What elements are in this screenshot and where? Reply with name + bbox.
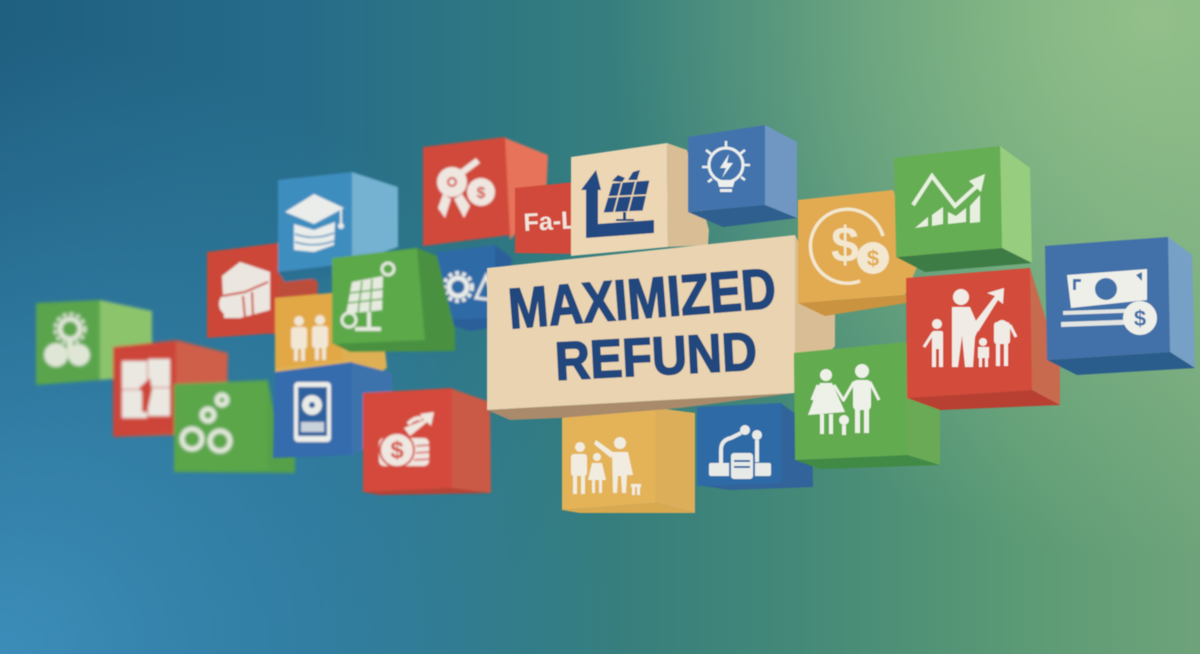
heading: Refund: REFUND [553, 321, 758, 392]
cube: orange dollar [798, 190, 925, 316]
cube: beige Maximized Refund main block [487, 235, 835, 420]
icon: family with arrow [571, 437, 641, 495]
cube: blue tablet [273, 362, 392, 458]
icon: couple and child [808, 364, 879, 435]
cube: red gift [113, 340, 228, 437]
icon: gears and coins [182, 395, 230, 451]
icon: graduation cap [285, 194, 344, 252]
icon: dollar circle and coin [810, 209, 889, 283]
cube: green solar [332, 248, 455, 352]
far-left cubes group [36, 300, 295, 473]
label: Fa-L: Fa-L [523, 206, 577, 237]
cube: orange family [562, 407, 695, 513]
cube: red family with arrow [906, 268, 1060, 410]
icon: dollar circle and coin: $ [831, 217, 859, 273]
icon: light bulb [702, 141, 750, 192]
icon: two people [291, 315, 328, 361]
icon: dollar circle and coin: $ [867, 246, 879, 271]
cube: red Fa-L [515, 182, 577, 254]
cube: green gear question [36, 300, 152, 385]
icon detail: ribbon centre: $ [477, 185, 486, 202]
icon: coin with arrow: $ [390, 437, 404, 464]
icon: divided gift box [122, 359, 170, 418]
icon: gear [444, 273, 494, 301]
icon: panel grid [607, 181, 647, 212]
cube: red ribbon top [423, 137, 548, 246]
cube: red coin stack [363, 388, 491, 495]
icon: solar panel [342, 263, 394, 331]
cube: green family [794, 342, 940, 469]
cube: red house split [207, 243, 318, 338]
icon: banknote and coin [1061, 269, 1157, 335]
icon detail: solar grid [348, 279, 383, 313]
cube: blue robot arm [697, 403, 813, 490]
icon: split house coins [219, 262, 270, 318]
icon detail: coin stack lines [414, 445, 430, 460]
heading: Maximized: MAXIMIZED [506, 257, 778, 341]
icon: ribbon and coin [437, 158, 495, 218]
icon detail: red crack [222, 282, 268, 318]
icon: family and growth arrow [924, 288, 1016, 367]
cube: green chart [894, 146, 1032, 272]
cube: blue gears [437, 245, 512, 331]
centre cubes group [487, 125, 835, 513]
icon: robot machinery [709, 425, 771, 480]
icon: tablet [294, 382, 331, 442]
icon: banknote and coin: $ [1134, 306, 1146, 331]
icon detail: cap bands [295, 233, 334, 245]
left-centre cubes group [207, 137, 548, 495]
icon: gears [44, 314, 90, 367]
icon: axes, arrow and solar panel [581, 170, 654, 238]
cube: blue money [1045, 237, 1195, 375]
cube: beige solar panel [571, 143, 709, 256]
icon detail: red split [139, 378, 152, 412]
cube: blue light bulb [688, 125, 797, 227]
icon: rising trend line and bars [913, 174, 985, 228]
cube: blue graduation cap [278, 172, 398, 282]
right cubes group [794, 146, 1195, 469]
cube: orange people [275, 293, 387, 372]
cube: green coins and gears [174, 380, 295, 473]
